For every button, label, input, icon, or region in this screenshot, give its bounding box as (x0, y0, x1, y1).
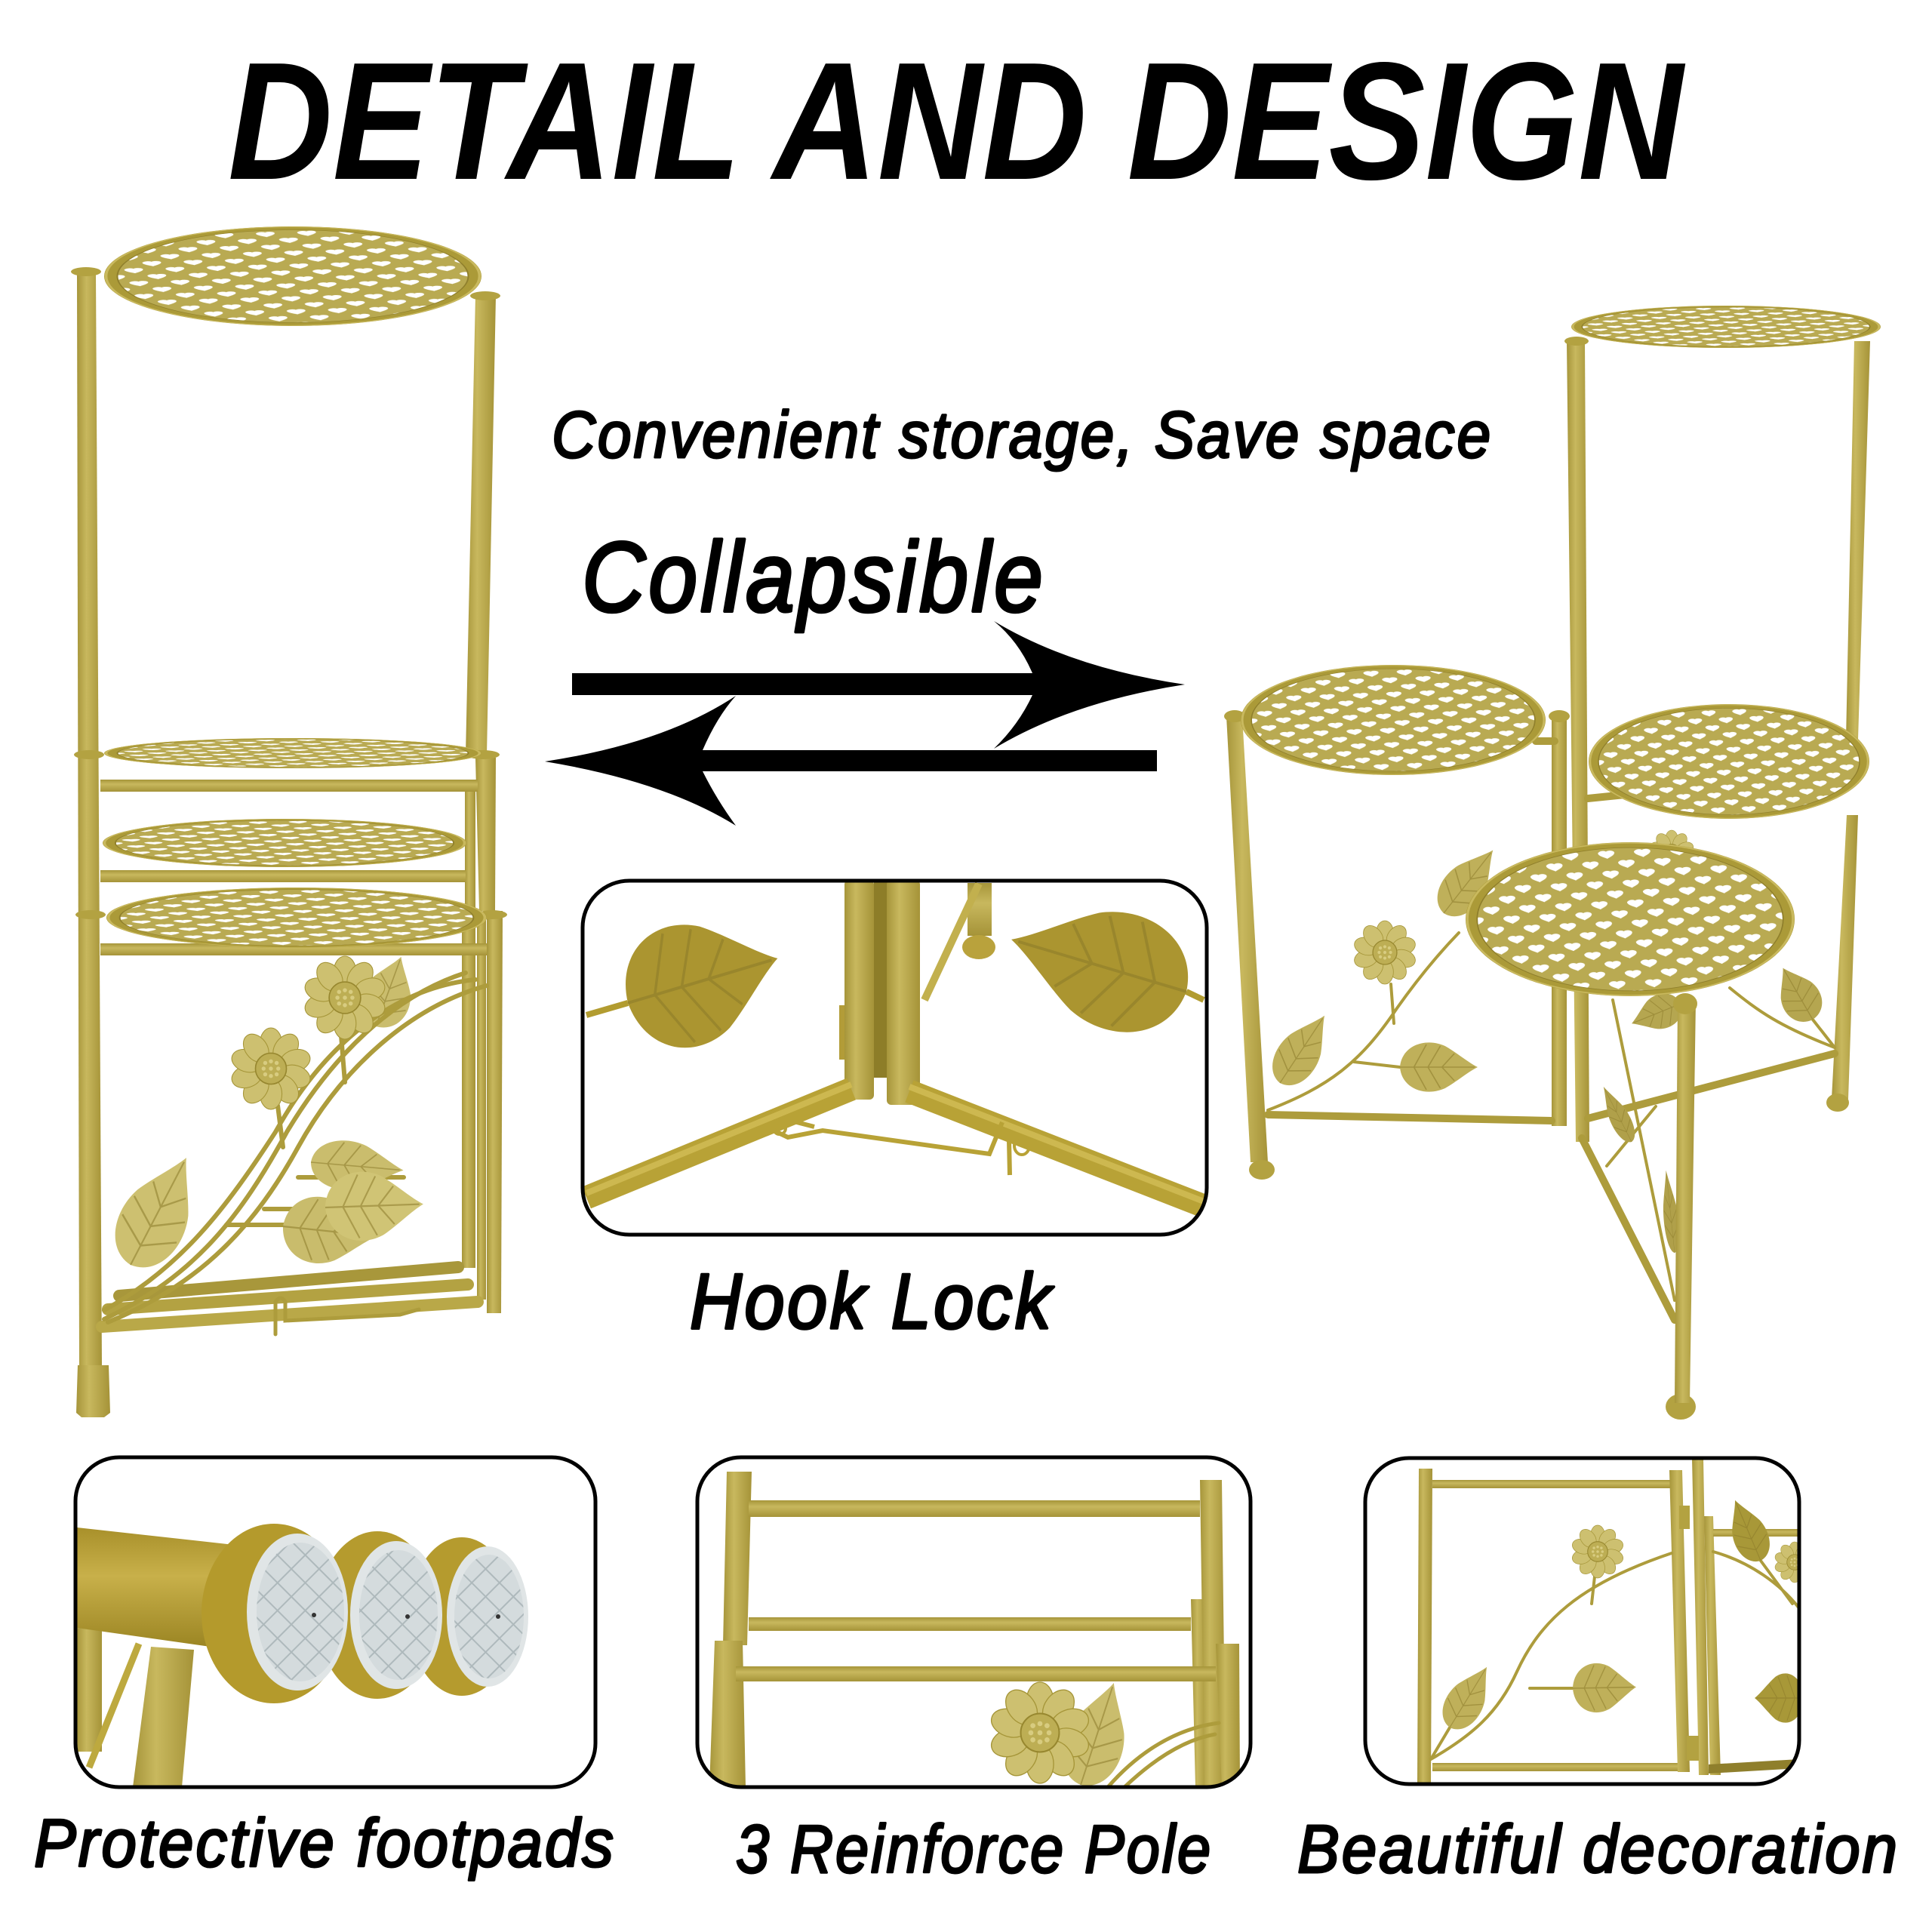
hook (275, 1298, 419, 1334)
flower (1352, 921, 1417, 984)
title: DETAIL AND DESIGN (228, 28, 1686, 215)
feet (1224, 337, 1849, 1420)
leaf behind flower (352, 949, 424, 1035)
fourth shelf (106, 888, 487, 948)
top shelf (1571, 306, 1881, 348)
shelf crossbars (100, 780, 487, 955)
footpad 2 (332, 1531, 442, 1699)
caption: collapsible: Collapsible (582, 521, 1046, 632)
caption: hook lock: Hook Lock (690, 1258, 1054, 1346)
front shelf (1466, 842, 1795, 996)
top shelf (104, 226, 481, 326)
caption: beautiful decoration: Beautiful decoration (1297, 1812, 1900, 1887)
flowers (302, 956, 388, 1039)
small flower behind shelf (1648, 830, 1695, 875)
poles (1226, 341, 1870, 1162)
leaves (1263, 1004, 1342, 1094)
footpad 1 (202, 1524, 348, 1703)
second shelf (104, 738, 481, 768)
stems (104, 973, 487, 1322)
vine decoration (1268, 933, 1835, 1300)
footpad 3 (424, 1537, 528, 1696)
panel: reinforce poles (697, 1457, 1251, 1794)
third shelf (103, 819, 466, 867)
right shelf (1589, 704, 1869, 819)
caption: protective footpads: Protective footpads (34, 1806, 616, 1881)
hook lock detail photo (586, 880, 1204, 1206)
decoration detail photo (1417, 1458, 1816, 1786)
footpad detail photo (77, 1524, 528, 1787)
arrow: left (545, 696, 1157, 826)
folded plant stand (71, 226, 507, 1417)
caption: convenient storage: Convenient storage, Save space (552, 398, 1493, 472)
front pole cap (1673, 993, 1697, 1014)
caption: reinforce pole: 3 Reinforce Pole (736, 1812, 1213, 1887)
bottom crossbars (102, 1267, 478, 1327)
foot (76, 1365, 110, 1417)
leaves (279, 1193, 380, 1269)
unfolded plant stand (1224, 306, 1881, 1420)
panel: hook lock (583, 880, 1207, 1235)
arrow: right (572, 621, 1185, 749)
bars (1268, 741, 1835, 1320)
panel: protective footpads (75, 1457, 595, 1787)
left shelf (1241, 665, 1546, 775)
panel: beautiful decoration (1365, 1458, 1816, 1786)
front pole (1675, 1000, 1696, 1403)
reinforce pole detail photo (709, 1472, 1240, 1794)
